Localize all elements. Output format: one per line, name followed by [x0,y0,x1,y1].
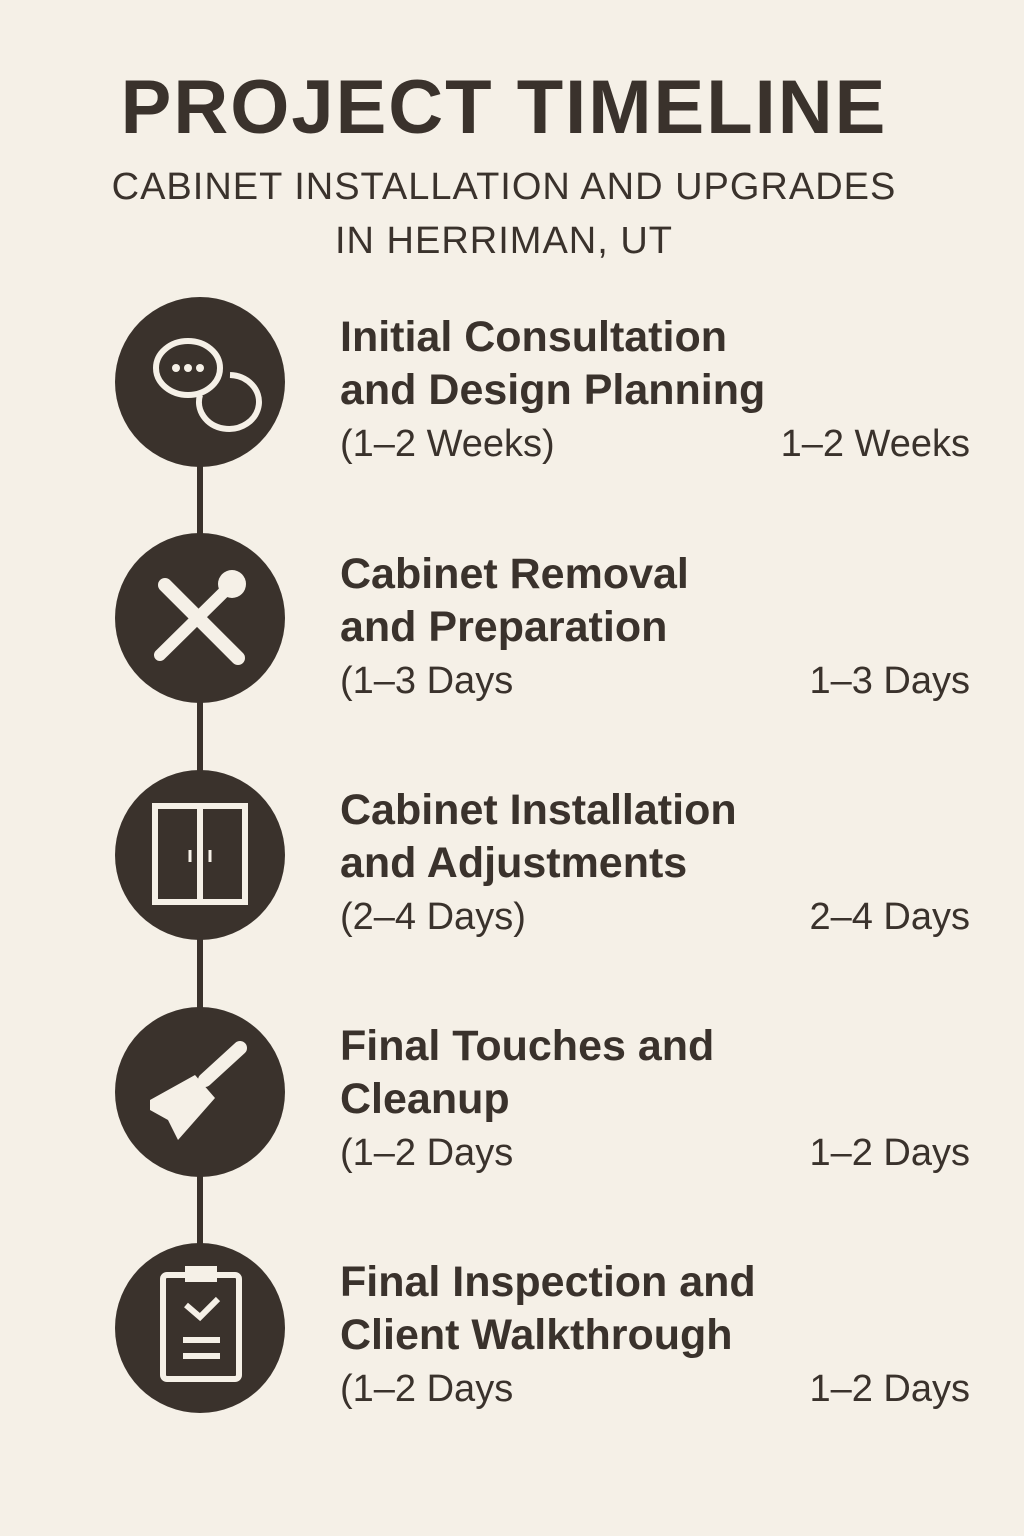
step 4: 1–2 Days [809,1132,970,1174]
step 3: Cabinet Installation [340,786,737,834]
subtitle: IN HERRIMAN, UT [335,220,673,262]
step 5: Client Walkthrough [340,1311,733,1359]
step 4 [340,1022,970,1174]
step 3: (2–4 Days) [340,896,526,938]
icon: chat [115,297,285,467]
step 5: (1–2 Days [340,1368,513,1410]
step 3: 2–4 Days [809,896,970,938]
step 1: and Design Planning [340,366,765,414]
icon: tools [115,533,285,703]
step 3: and Adjustments [340,839,687,887]
step 2: Cabinet Removal [340,550,689,598]
step 4: Final Touches and [340,1022,714,1070]
step 2: (1–3 Days [340,660,513,702]
subtitle: CABINET INSTALLATION AND UPGRADES [112,166,896,208]
step 5: Final Inspection and [340,1258,756,1306]
step 1 [340,313,970,465]
icon: clipboard [115,1243,285,1413]
step 3 [340,786,970,938]
step 1: 1–2 Weeks [781,423,970,465]
timeline icons [115,297,285,1413]
step 1: Initial Consultation [340,313,727,361]
step 5: 1–2 Days [809,1368,970,1410]
icon: cabinet [115,770,285,940]
subtitle [112,166,896,262]
step 2: 1–3 Days [809,660,970,702]
step 2 [340,550,970,702]
step 1: (1–2 Weeks) [340,423,555,465]
step 5 [340,1258,970,1410]
title: PROJECT TIMELINE [121,65,887,150]
step 4: (1–2 Days [340,1132,513,1174]
step 2: and Preparation [340,603,667,651]
icon: brush [115,1007,285,1177]
step 4: Cleanup [340,1075,510,1123]
